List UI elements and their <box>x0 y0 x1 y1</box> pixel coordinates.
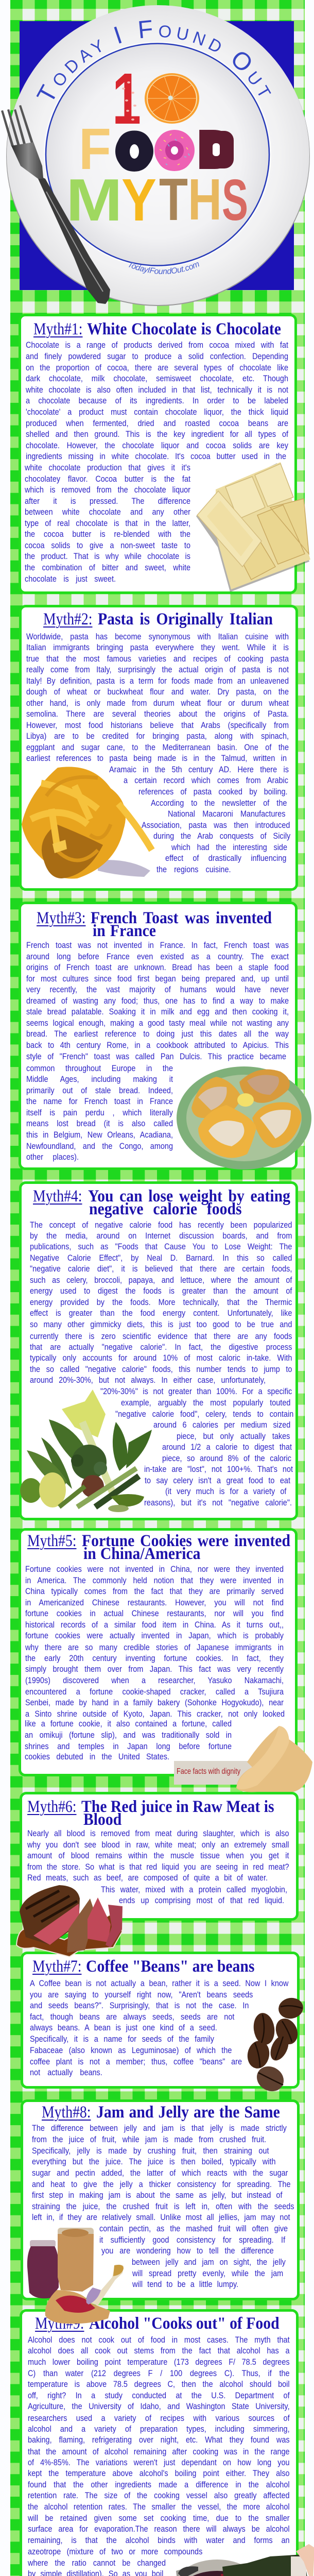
text block: myth 2 <box>26 632 290 874</box>
food lettering: FOOD: F <box>79 116 111 181</box>
heading: myth 2: Myth#2: <box>43 610 92 629</box>
text block: myth 9: alcohol does all cook out stems from the fact that alcohol has a <box>28 2346 289 2355</box>
dinner plate <box>6 5 310 306</box>
heading: myth 5: in China/America <box>83 1545 200 1563</box>
blue napkin <box>20 21 294 290</box>
text block: myth 4: around 20%-30%, but not always. In either case, unfortunately, <box>30 1375 266 1385</box>
text block: myth 4: "negative calorie diet", it is believed that there are certain foods, <box>30 1264 292 1274</box>
heading: myth 5 <box>27 1532 290 1563</box>
text block: myth 7: A Coffee bean is not actually a bean, rather it is a seed. Now I know <box>30 1978 288 1988</box>
text block: myth 3: French toast was not invented in France. In fact, French toast was <box>26 940 289 950</box>
text block: myth 8: will tend to be a little lumpy. <box>132 2279 238 2289</box>
text block: myth 1: dark chocolate, milk chocolate, semisweet chocolate, etc. Though <box>26 374 288 383</box>
image: green vegetables <box>20 1389 152 1512</box>
text block: myth 2: Association, pasta was then introduced <box>142 820 290 830</box>
text block: myth 6: This water, mixed with a protein called myoglobin, <box>101 1885 287 1894</box>
text block: myth 8: will spread pretty evenly, while the jam <box>132 2268 283 2278</box>
text block: myth 1: a chocolate because of its ingredients. In order to be labeled <box>26 396 288 405</box>
text block: myth 4: "20%-30%" is not greater than 100%. For a specific <box>100 1386 292 1396</box>
heading: myth 4: negative calorie foods <box>89 1200 242 1218</box>
text block: myth 3: this in Belgium, New Orleans, Acadiana, <box>26 1130 173 1140</box>
text block: myth 4: to say celery isn't a great food to eat <box>145 1476 290 1485</box>
text block: myth 3: origins of French toast are unknown. Bread has been a staple food <box>26 962 289 972</box>
heading: myth 5: Myth#5: <box>27 1532 77 1550</box>
panel: myth 2 <box>19 605 298 891</box>
panel: myth 7 <box>21 1952 300 2089</box>
text block: myth 4: Negative Calorie Effect", by Neal D. Barnard. In this so called <box>30 1253 292 1262</box>
text block: myth 8: straining the juice, the crushed fruit is left in, often with the seeds <box>32 2201 294 2211</box>
text block: myth 2: other hand, is only made from durum wheat flour or durum wheat <box>26 698 289 708</box>
text block: myth 5: an omikuji (fortune slip), and was traditionally sold in <box>25 1730 231 1740</box>
text block: myth 8: between jelly and jam on sight, the jelly <box>132 2257 285 2267</box>
food lettering: MYTHS: S <box>222 167 248 232</box>
text block: myth 3: primarily out of stale bread. Indeed, <box>26 1085 173 1095</box>
text block: myth 5: like a fortune cookie, it also contained a fortune, called <box>25 1719 231 1728</box>
text block: myth 8: The difference between jelly and jam is that jelly is made strictly <box>32 2123 286 2133</box>
dinner fork <box>1 105 110 304</box>
text block: myth 7: Specifically, it is a name for seeds of the family <box>30 2034 214 2044</box>
text block: myth 9: researchers used a variety of recipes with various sources of <box>28 2413 289 2422</box>
text block: myth 5: cookies debuted in the United States. <box>25 1752 169 1761</box>
text block: myth 5: in America. The commonly held notion that they were invented in <box>25 1575 284 1585</box>
heading: myth 4 <box>33 1187 290 1218</box>
text block: myth 5: Senbei, made by hand in a family bakery (Sohonke Hogyokudo), near <box>25 1698 284 1707</box>
text block: myth 8: Specifically, jelly is made by crushing fruit, then straining out <box>32 2146 269 2156</box>
food lettering: 10 <box>112 58 199 139</box>
text block: myth 9: that the amount of alcohol remaining after cooking was in the range <box>28 2446 289 2456</box>
image: sliced steak <box>16 1885 123 1957</box>
text block: myth 4: such as celery, broccoli, papaya, and lettuce, where the amount of <box>30 1275 292 1285</box>
text block: myth 8: left in, if they are relatively small. Unlike most all jellies, jam may not <box>32 2212 290 2222</box>
text block: myth 4: effect is greater than the food energy content. Unfortunately, like <box>30 1308 292 1318</box>
food lettering: 10: 1 <box>112 58 141 139</box>
text block: myth 5: historical records of a similar food item in China. As it turns out,, <box>25 1620 284 1630</box>
text block: myth 4: "negative calorie food", celery, tends to contain <box>115 1409 293 1419</box>
text block: myth 7: always beans. A bean is just one kind of a seed. <box>30 2023 217 2032</box>
food lettering: FOOD: O <box>153 118 196 183</box>
heading: myth 6: Blood <box>83 1810 121 1829</box>
food lettering: MYTHS: Y <box>121 166 156 233</box>
text block: myth 1: the combination of bitter and sweet, white <box>25 563 190 572</box>
heading: myth 9: Myth#9: <box>35 2314 84 2333</box>
panel: myth 9 <box>20 2309 299 2576</box>
text block: myth 4: around 6 calories per medium sized <box>153 1420 290 1430</box>
heading: myth 6: The Red juice in Raw Meat is <box>81 1798 274 1816</box>
text block: myth 9: C) than water (212 degrees F / 100 degrees C). Thus, if the <box>28 2368 289 2378</box>
text block: myth 5: Fortune cookies were not invented in China, nor were they invented <box>25 1564 284 1574</box>
text block: myth 1: chocolate. However, the chocolate liquor and cocoa solids are key <box>26 440 288 450</box>
fortune slip <box>174 1761 254 1785</box>
text block: myth 4: example, arguably the most popularly touted <box>121 1398 290 1408</box>
text block: myth 4: so many other gimmicky diets, this is just too good to be true and <box>30 1319 292 1329</box>
text block: myth 2: dough of wheat or buckwheat flour and water. Dry pasta, on the <box>26 687 289 697</box>
heading: myth 4: Myth#4: <box>33 1187 82 1206</box>
text block: myth 9: where the ratio cannot be changed <box>28 2558 166 2568</box>
text block: myth 2: effect of drastically influencing <box>165 853 286 863</box>
text block: myth 9: surface area for evaporation.The reason there will always be alcohol <box>28 2524 289 2534</box>
text block: myth 4: reasons), but it's not "negative calorie". <box>144 1498 292 1507</box>
text block: myth 3: means lost bread (it is also called <box>26 1118 173 1128</box>
text block: myth 2: during the Arab conquests of Sicily <box>153 831 290 841</box>
text block: myth 2: the regions cuisine. <box>156 865 231 874</box>
text block: myth 9: found that the other ingredients made a difference in the alcohol <box>28 2479 289 2489</box>
header illustration: plate, napkin and fork <box>1 5 310 306</box>
fortune slip: Face facts with dignity <box>177 1767 240 1776</box>
text block: myth 9: azeotrope (mixture of two or more compounds <box>28 2547 202 2556</box>
heading: myth 1: Myth#1: <box>33 320 83 338</box>
panel: myth 5 <box>19 1528 298 1776</box>
text block: myth 9: baking, flaming, refrigerating over night, etc. What they found was <box>28 2435 289 2445</box>
food lettering: FOOD <box>79 116 236 183</box>
text block: myth 3: stale bread palatable. Soaking it in milk and egg and then cooking it, <box>26 1007 289 1016</box>
text block: myth 9: of 4%-85%. The variations weren't just dependant on how long you <box>28 2458 289 2467</box>
text block: myth 6 <box>27 1828 289 1905</box>
heading: myth 2: Pasta is Originally Italian <box>98 610 272 629</box>
text block: myth 4 <box>30 1220 293 1507</box>
food lettering: MYTHS: M <box>66 166 123 233</box>
text block: myth 1: chocolatey flavor. Cocoa butter is the fat <box>25 474 190 484</box>
text block: myth 1: Chocolate is a range of products derived from cocoa mixed with fat <box>26 340 288 350</box>
heading: myth 3 <box>37 909 272 940</box>
text block: myth 2: Italy! By definition, pasta is a term for foods made from an unleavened <box>26 676 289 685</box>
text block: myth 4: around 1/2 a calorie to digest that <box>162 1442 292 1452</box>
text block: myth 4: piece, so around 8% of the caloric <box>162 1453 291 1463</box>
text block: myth 1: chocolate is just sweet. <box>25 574 115 583</box>
image: white chocolate bar <box>196 462 310 592</box>
text block: myth 6: amount of blood remains within the muscle tissue when you get it <box>27 1851 289 1860</box>
text block: myth 8: you are wondering how to tell the difference <box>101 2246 274 2256</box>
text block: myth 9: the alcohol retention rates. The smaller the vessel, the more alcohol <box>28 2502 289 2512</box>
food lettering: MYTHS: T <box>159 166 188 233</box>
heading: myth 3: in France <box>93 922 156 940</box>
text block: myth 3: Middle Ages, including making it <box>26 1074 173 1084</box>
text block: myth 4: (it very much is for a variety of <box>165 1486 286 1496</box>
text block: myth 8: contain pectin, as the mashed fruit will often give <box>99 2224 288 2233</box>
text block: myth 4: the so called "negative calorie" foods, this number tends to jump to <box>30 1364 292 1374</box>
text block: myth 4: piece, but only actually takes <box>177 1431 290 1441</box>
text block: myth 9: Agriculture, the University of Idaho, and Washington State University, <box>28 2401 289 2411</box>
food lettering: MYTHS: H <box>188 167 222 232</box>
text block: myth 1: the cocoa butter is re-blended with the <box>25 529 190 539</box>
text block: myth 2: According to the newsletter of the <box>151 798 287 808</box>
panel: myth 4 <box>19 1181 298 1520</box>
text block: myth 1: white chocolate production that gives it it's <box>25 463 190 472</box>
text block: myth 2: which had the interesting side <box>171 842 287 852</box>
text block: myth 1: produced when fermented, dried and roasted cocoa beans are <box>26 418 288 428</box>
text block: myth 4: currently there is zero scientific evidence that there are any foods <box>30 1331 292 1341</box>
text block: myth 6: ends up comprising most of that red liquid. <box>119 1895 284 1905</box>
plate rim title: TODAY I FOUND OUT <box>36 20 271 99</box>
text block: myth 1: ingredients missing in white chocolate. It's cocoa butter used in the <box>26 451 286 461</box>
text block: myth 5: fortune cookies were actually invented in Japan, which is probably <box>25 1631 284 1640</box>
text block: myth 9: alcohol and a variety of preparation types, including simmering, <box>28 2424 289 2434</box>
text block: myth 3: seems logical enough, making a good tasty meal while not wasting any <box>26 1018 289 1028</box>
text block: myth 7 <box>30 1978 288 2077</box>
text block: myth 2: true that the most famous varieties and recipes of cooking pasta <box>26 653 289 664</box>
plate rim web address: TodayIFoundOut.com <box>129 261 199 274</box>
food lettering: FOOD: O <box>114 119 154 183</box>
text block: myth 3: very recently, the vast majority of humans would have never <box>26 985 289 994</box>
text block: myth 2: earliest references to pasta being made is in the Talmud, written in <box>26 753 287 763</box>
food lettering: MYTHS <box>66 166 248 233</box>
text block: myth 9: much lower boiling point temperature (173 degrees F/ 78.5 degrees <box>28 2357 289 2367</box>
text block: myth 8: and heat to give the jelly a thicker consistency for spreading. The <box>32 2179 290 2189</box>
text block: myth 7: coffee plant is not a member; thus, coffee "beans" are <box>30 2057 242 2066</box>
heading: myth 3: Myth#3: <box>37 909 85 927</box>
panel: myth 1 <box>19 314 297 594</box>
text block: myth 6: why you don't see blood in raw, white meat; only an extremely small <box>27 1839 289 1850</box>
text block: myth 4: in-take are "lost", not 100+%. That's not <box>144 1464 293 1474</box>
text block: myth 5: (1990s) discovered when a researcher, Yasuko Nakamachi, <box>25 1675 284 1685</box>
text block: myth 9: remaining, is that the alcohol binds with water and forms an <box>28 2535 289 2545</box>
text block: myth 7: not actually beans. <box>30 2067 102 2077</box>
text block: myth 4: by the media, around on Internet discussion boards, and from <box>30 1231 292 1241</box>
text block: myth 9: kept the temperature above alcohol's boiling point either. They also <box>28 2468 289 2478</box>
text block: myth 8: from the juice of fruit, while jam is made from crushed fruit. <box>32 2134 266 2144</box>
text block: myth 4: The concept of negative calorie food has recently been popularized <box>30 1220 292 1230</box>
text block: myth 3: common throughout Europe in the <box>26 1063 173 1073</box>
text block: myth 9: will be retained given some set cooking time, due to the smaller <box>28 2513 289 2523</box>
text block: myth 8: first step in making jam is about the same as jelly, but instead of <box>32 2190 282 2200</box>
text block: myth 3: for most cultures since food first began being prepared and, up until <box>26 974 289 983</box>
text block: myth 5: the early 20th century inventing fortune cookies. In fact, they <box>25 1653 284 1663</box>
text block: myth 5: fortune cookies in actual Chinese restaurants, nor will you find <box>25 1608 284 1618</box>
text block: myth 2: a certain record which comes from Arabic <box>124 775 288 785</box>
text block: myth 1: white chocolate is also often included in that list, technically it is not <box>26 385 288 395</box>
cookie <box>236 1726 312 1792</box>
text block: myth 5 <box>25 1564 285 1761</box>
image: jam jars and toast <box>27 2228 124 2324</box>
text block: myth 8: everything but the juice. The juice is then boiled, typically with <box>32 2157 275 2166</box>
text block: myth 1: and finely powdered sugar to produce a solid confection. Depending <box>26 351 288 361</box>
text block: myth 9: temperature is above 78.5 degrees C, then the alcohol should boil <box>28 2379 289 2389</box>
text block: myth 3: bread. The earliest reference to doing just this dates all the way <box>26 1029 289 1039</box>
text block: myth 3: dreamed of wasting any food; thus, one has to find a way to make <box>26 996 289 1006</box>
text block: myth 9: off, right? In a study conducted at the U.S. Department of <box>28 2391 289 2400</box>
text block: myth 1: shelled and then ground. This is the key ingredient for all types of <box>26 429 288 439</box>
text block: myth 1: after it is pressed. The difference <box>25 496 190 506</box>
heading: myth 7: Coffee "Beans" are beans <box>85 1957 254 1976</box>
text block: myth 1: 'chocolate' a product must contain chocolate liquor, the thick liquid <box>26 407 288 417</box>
text block: myth 4: typically only accounts for around 10% of most caloric in-take. With <box>30 1353 292 1363</box>
text block: myth 1: on the proportion of cocoa, there are several types of chocolate like <box>26 363 288 372</box>
image: fortune cookie with paper slip <box>174 1726 312 1792</box>
text block: myth 8 <box>32 2123 294 2289</box>
text block: myth 2: really come from Italy, surprisingly the actual origin of pasta is not <box>26 665 289 674</box>
text block: myth 9 <box>28 2335 290 2576</box>
text block: myth 1: between white chocolate and any other <box>25 507 190 517</box>
image: french toast on green plate <box>177 1066 311 1170</box>
heading: myth 9: Alcohol "Cooks out" of Food <box>89 2314 280 2333</box>
food lettering: 10: 0 <box>145 62 199 137</box>
text block: myth 2: Italian immigrants bringing pasta everywhere they went. While it is <box>26 642 289 652</box>
text block: myth 2: references of pasta cooked by boiling. <box>138 787 287 796</box>
text block: myth 5: why there are so many credible stories of Japanese immigrants in <box>25 1642 284 1652</box>
image: coffee beans <box>247 1998 303 2092</box>
heading: myth 8: Jam and Jelly are the Same <box>96 2103 280 2122</box>
image: pasta nest <box>22 767 154 879</box>
text block: myth 3 <box>26 940 289 1162</box>
text block: myth 2: semolina. There are several theories about the origins of Pasta. <box>26 709 289 719</box>
text block: myth 6: Nearly all blood is removed from meat during slaughter, which is also <box>27 1828 289 1838</box>
text block: myth 5: in Americanized Chinese restaurants. However, you will not find <box>25 1597 284 1607</box>
text block: myth 3: Newfoundland, and the Congo, among <box>26 1141 173 1151</box>
text block: myth 9: Alcohol does not cook out of food in most cases. The myth that <box>28 2335 289 2345</box>
text block: myth 4: publications, such as "Foods that Cause You to Lose Weight: The <box>30 1242 292 1251</box>
panel: myth 3 <box>19 902 298 1170</box>
text block: myth 7: you are saying to yourself right now, "Aren't beans seeds <box>30 1990 253 1999</box>
text block: myth 1: the product. That is why while chocolate is <box>25 551 190 561</box>
text block: myth 6: Red meats, such as beef, are composed of quite a bit of water. <box>27 1873 267 1883</box>
heading: myth 6: Myth#6: <box>27 1798 77 1816</box>
heading: myth 1: White Chocolate is Chocolate <box>87 320 281 338</box>
text block: myth 4: energy provided by the foods. More technically, that the Thermic <box>30 1297 292 1307</box>
text block: myth 2: However, most food historians believe that Arabs (specifically from <box>26 720 289 730</box>
text block: myth 7: and seeds beans?". Surprisingly, that is not the case. In <box>30 2001 249 2010</box>
text block: myth 6: from the store. So what is that red liquid you are seeing in red meat? <box>27 1862 289 1872</box>
text block: myth 2: Aramaic in the 5th century AD. Here there is <box>109 765 289 774</box>
text block: myth 3: back to 4th century Rome, in a cookbook attributed to Apicius. This <box>26 1040 289 1050</box>
text block: myth 8: sugar and pectin added, the latter of which reacts with the sugar <box>32 2168 288 2178</box>
text block: myth 3: around long before France even existed as a country. The exact <box>26 951 289 961</box>
heading: myth 7: Myth#7: <box>32 1957 81 1976</box>
text block: myth 2: Libya) are to be credited for bringing pasta, along with spinach, <box>26 731 289 741</box>
panel: myth 6 <box>20 1792 299 1921</box>
text block: myth 1: type of real chocolate is that in the latter, <box>25 518 190 528</box>
text block: myth 3: the name for French toast in France <box>26 1096 173 1106</box>
heading: myth 4: You can lose weight by eating <box>88 1187 290 1206</box>
heading: myth 8: Myth#8: <box>42 2103 91 2122</box>
text block: myth 2: Worldwide, pasta has become synonymous with Italian cuisine with <box>26 632 289 641</box>
text block: myth 7: fact, though beans are always seeds, seeds are not <box>30 2012 234 2022</box>
image: wine poured into cooking pot <box>176 2544 314 2576</box>
text block: myth 8: it sufficiently good consistency for spreading. If <box>99 2235 285 2245</box>
text block: myth 3: itself is pain perdu , which literally <box>26 1108 173 1117</box>
text block: myth 5: a Sinto shrine outside of Kyoto, Japan. This cracker, not only looked <box>25 1709 285 1719</box>
text block: myth 1: cocoa solids to give a non-sweet taste to <box>25 540 190 550</box>
text block: myth 3: style of "French" toast was called Pan Dulcis. This practice became <box>26 1052 286 1061</box>
text block: myth 5: simply brought them over from Japan. This fact was very recently <box>25 1664 284 1674</box>
text block: myth 4: energy used to digest the foods is greater than the amount of <box>30 1286 292 1296</box>
heading: myth 5: Fortune Cookies were invented <box>82 1532 290 1550</box>
text block: myth 5: shrines and temples in Japan long before fortune <box>25 1741 231 1751</box>
heading: myth 3: French Toast was invented <box>91 909 272 927</box>
food lettering: FOOD: D <box>196 118 236 181</box>
text block: myth 1 <box>25 340 288 583</box>
text block: myth 3: other places). <box>26 1152 79 1162</box>
text block: myth 1: which is removed from the chocolate liquor <box>25 485 190 495</box>
text block: myth 7: Fabaceae (also known as Leguminosae) of which the <box>30 2045 232 2055</box>
panel: myth 8 <box>21 2099 300 2300</box>
text block: myth 2: National Macaroni Manufactures <box>168 809 285 819</box>
text block: myth 9: retention rate. The size of the cooking vessel also greatly affected <box>28 2490 289 2500</box>
text block: myth 5: encountered a fortune cookie-shaped cracker, called a Tsujiura <box>25 1687 284 1697</box>
text block: myth 5: China typically comes from the fact that they are primarily served <box>25 1586 284 1596</box>
text block: myth 2: eggplant and sugar cane, to the Mediterranean basin. One of the <box>26 742 289 752</box>
text block: myth 4: that are actually "negative calorie". In fact, the digestive process <box>30 1342 292 1352</box>
heading: myth 6 <box>27 1798 274 1829</box>
